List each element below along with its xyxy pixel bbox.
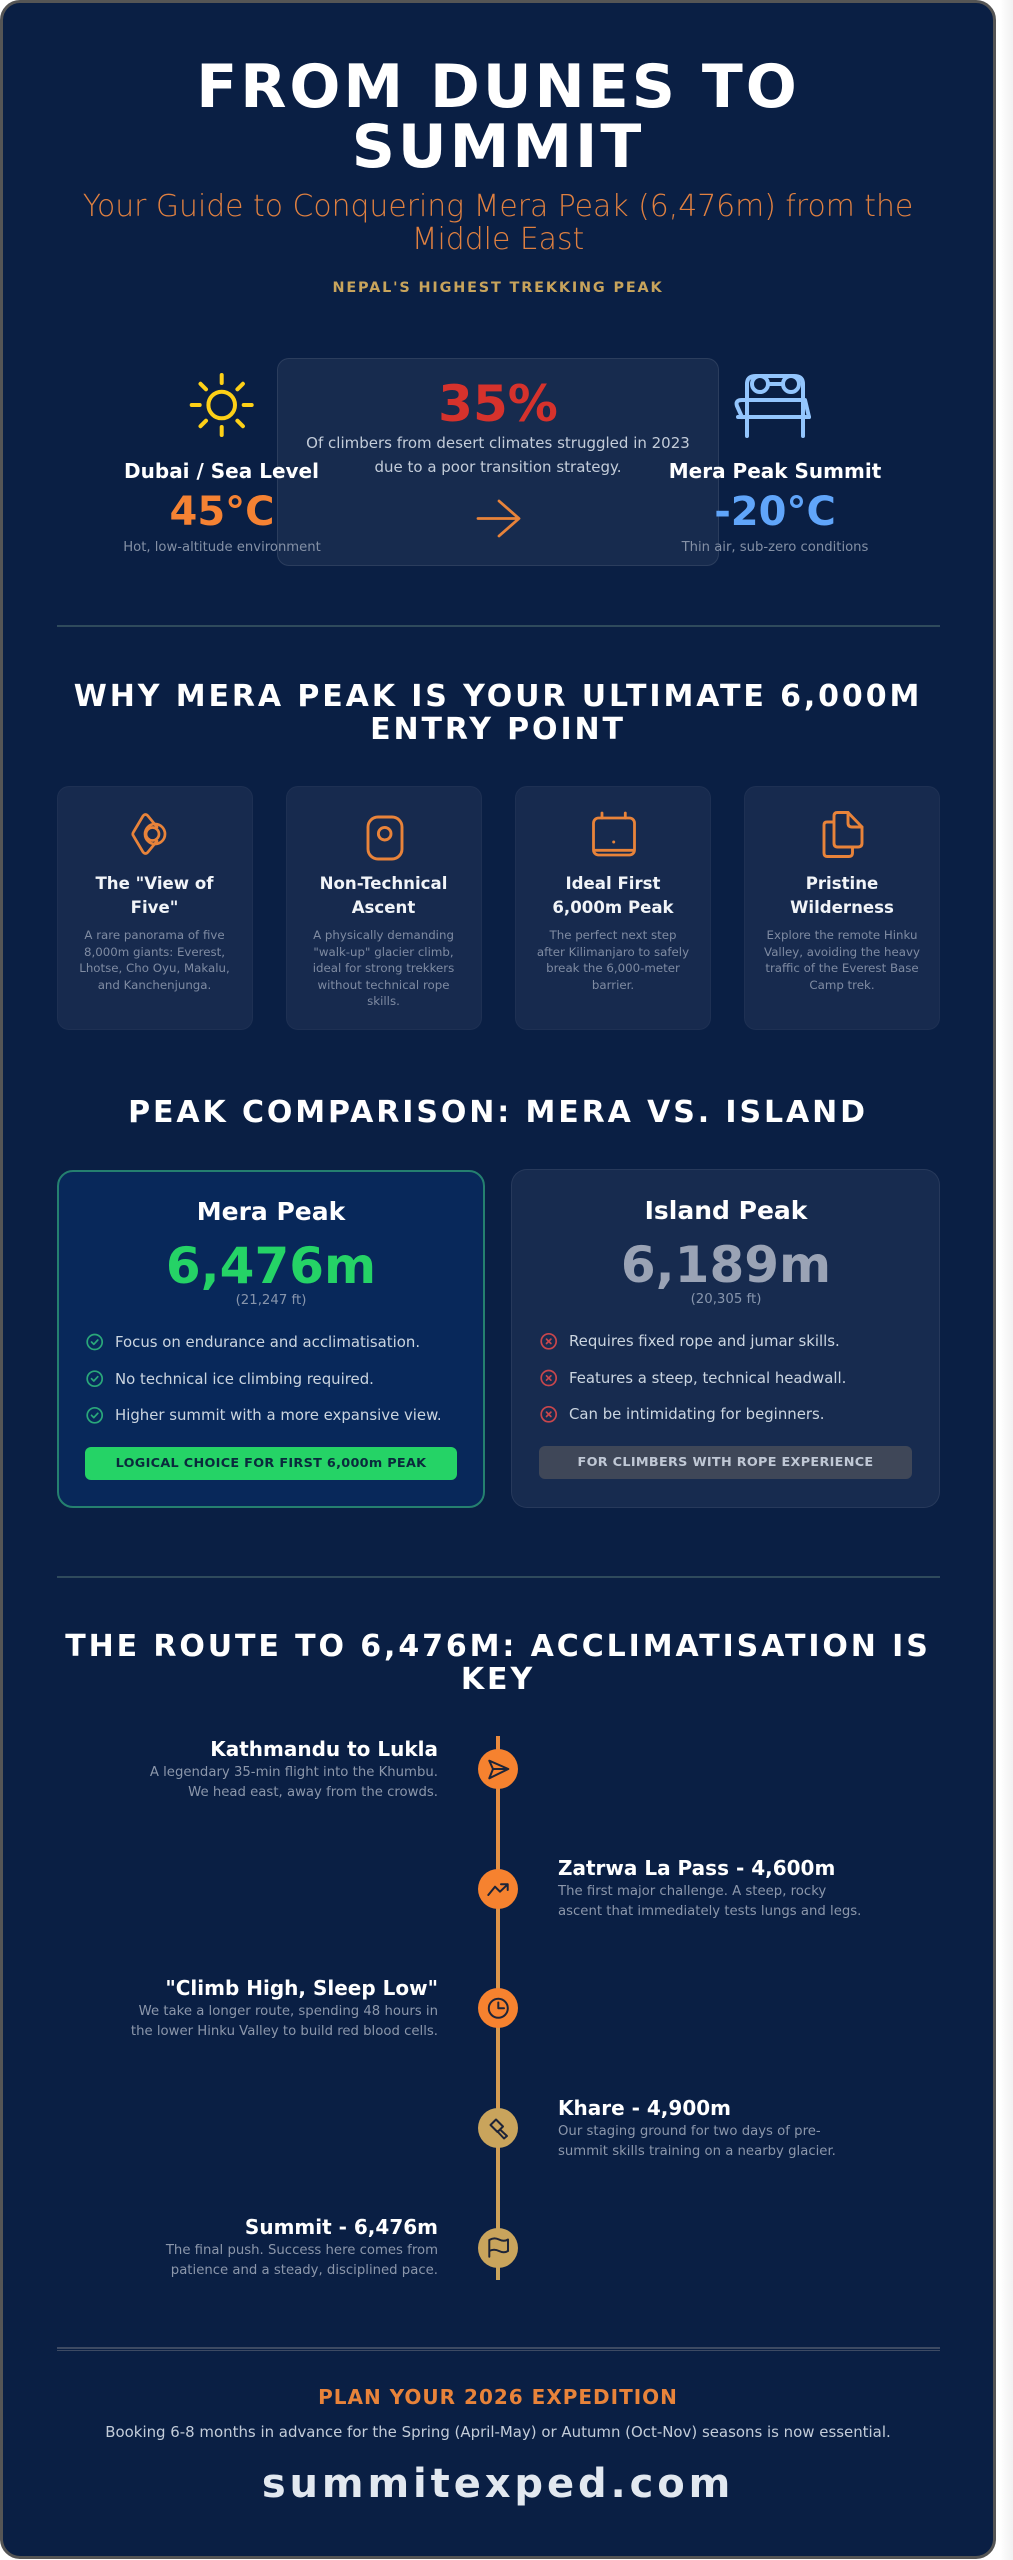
card title: Pristine (806, 874, 878, 893)
item text: patience and a steady, disciplined pace. (171, 2263, 438, 2278)
panel: 35% statistic (277, 358, 719, 566)
card text: barrier. (592, 978, 634, 992)
card title: Ascent (352, 898, 415, 916)
timeline item 3 (131, 1976, 438, 2039)
card text: 8,000m giants: Everest, (84, 944, 225, 958)
card text (79, 928, 230, 992)
list item: Requires fixed rope and jumar skills. (569, 1332, 840, 1350)
card text: A physically demanding (313, 928, 454, 942)
Island verdict badge: FOR CLIMBERS WITH ROPE EXPERIENCE (578, 1455, 873, 1470)
summit label: Mera Peak Summit (669, 459, 881, 483)
statistic description: due to a poor transition strategy. (374, 458, 622, 476)
panel: Island Peak (511, 1169, 940, 1508)
summit temperature: -20°C (714, 489, 836, 535)
card text (313, 928, 454, 1008)
card title: Five" (131, 898, 178, 916)
subtitle: Your Guide to Conquering Mera Peak (6,476m) from the (83, 189, 913, 224)
title: FROM DUNES TO (196, 52, 800, 122)
card text: break the 6,000-meter (546, 961, 680, 975)
statistic number: 35% (438, 375, 558, 433)
Mera verdict badge: LOGICAL CHOICE FOR FIRST 6,000m PEAK (116, 1456, 426, 1471)
item text: We take a longer route, spending 48 hours in (139, 2004, 438, 2019)
item text (558, 2124, 836, 2159)
item text: summit skills training on a nearby glacier. (558, 2144, 836, 2159)
item text: We head east, away from the crowds. (188, 1785, 438, 1800)
item title: Summit - 6,476m (245, 2215, 438, 2239)
list item: Features a steep, technical headwall. (569, 1369, 846, 1387)
footer text: Booking 6-8 months in advance for the Spring (April-May) or Autumn (Oct-Nov) seasons is now essential. (105, 2423, 891, 2441)
card title: Wilderness (790, 898, 894, 916)
panel: Pristine Wilderness (744, 786, 940, 1030)
card text: Explore the remote Hinku (767, 928, 917, 942)
item text: The first major challenge. A steep, rocky (558, 1884, 826, 1899)
Mera height: 6,476m (166, 1237, 376, 1295)
subtitle (83, 189, 913, 257)
panel: Mera Peak (56, 1170, 485, 1508)
card text: Valley, avoiding the heavy (764, 944, 920, 958)
item text: The final push. Success here comes from (166, 2243, 438, 2258)
Mera height in feet: (21,247 ft) (236, 1293, 306, 1308)
item text: Our staging ground for two days of pre- (558, 2124, 821, 2139)
item text: the lower Hinku Valley to build red blood cells. (131, 2024, 438, 2039)
statistic description (306, 434, 690, 476)
title (196, 52, 800, 182)
card title (320, 874, 447, 916)
card text: "walk-up" glacier climb, (313, 944, 454, 958)
card title (552, 874, 674, 916)
panel: Non-Technical Ascent (286, 786, 482, 1030)
card title (95, 874, 214, 916)
summit note: Thin air, sub-zero conditions (682, 540, 868, 555)
timeline item 2 (558, 1856, 861, 1919)
Island height in feet: (20,305 ft) (691, 1292, 761, 1307)
item title: Khare - 4,900m (558, 2096, 731, 2120)
card title: Ideal First (566, 874, 660, 893)
card text (764, 928, 920, 992)
card text: skills. (367, 994, 400, 1008)
heading: the route: KEY (461, 1662, 535, 1697)
item text (558, 1884, 861, 1919)
panel: View of Five (56, 786, 252, 1030)
list item: No technical ice climbing required. (115, 1370, 374, 1388)
item text (150, 1765, 438, 1800)
item title: Kathmandu to Lukla (210, 1737, 438, 1761)
list item: Higher summit with a more expansive view. (115, 1406, 442, 1424)
item title: "Climb High, Sleep Low" (165, 1976, 438, 2000)
heading: why Mera Peak (74, 679, 922, 747)
item text (131, 2004, 438, 2039)
card text: traffic of the Everest Base (765, 961, 919, 975)
Mera name: Mera Peak (197, 1196, 345, 1226)
card text: after Kilimanjaro to safely (537, 944, 689, 958)
Island name: Island Peak (645, 1196, 807, 1224)
card text: without technical rope (318, 978, 450, 992)
Mera verdict badge (85, 1447, 457, 1480)
item title: Zatrwa La Pass - 4,600m (558, 1856, 835, 1880)
list item: Focus on endurance and acclimatisation. (115, 1333, 420, 1351)
card text: A rare panorama of five (84, 928, 225, 942)
panel: Ideal First Peak (515, 786, 711, 1030)
kicker: NEPAL'S HIGHEST TREKKING PEAK (332, 280, 664, 296)
item text: A legendary 35-min flight into the Khumbu. (150, 1765, 438, 1780)
timeline item 1 (150, 1737, 438, 1800)
title: SUMMIT (352, 112, 644, 182)
card text (537, 928, 689, 992)
list item: Can be intimidating for beginners. (569, 1405, 824, 1423)
heading: the route: THE ROUTE TO 6,476M: ACCLIMATISATION IS (65, 1629, 931, 1664)
Island list (540, 1332, 846, 1423)
timeline item 4 (558, 2096, 836, 2159)
subtitle: Middle East (412, 222, 584, 257)
card text: and Kanchenjunga. (98, 978, 211, 992)
heading: why Mera Peak: ENTRY POINT (370, 712, 626, 747)
origin temperature: 45°C (169, 489, 275, 535)
card title (790, 874, 894, 916)
card text: Camp trek. (809, 978, 875, 992)
item text (166, 2243, 438, 2278)
card title: The "View of (95, 874, 214, 893)
heading: the route (65, 1629, 931, 1697)
footer heading: PLAN YOUR 2026 EXPEDITION (318, 2385, 678, 2409)
Mera list (86, 1333, 442, 1424)
card title: Non-Technical (320, 874, 447, 893)
card text: Lhotse, Cho Oyu, Makalu, (79, 961, 230, 975)
origin label: Dubai / Sea Level (124, 459, 319, 483)
item text: ascent that immediately tests lungs and legs. (558, 1904, 861, 1919)
Island verdict badge (539, 1446, 912, 1479)
heading: why Mera Peak: WHY MERA PEAK IS YOUR ULTIMATE 6,000M (74, 679, 922, 714)
timeline item 5 (166, 2215, 438, 2278)
Island height: 6,189m (621, 1236, 831, 1294)
origin note: Hot, low-altitude environment (123, 540, 321, 555)
footer website: summitexped.com (262, 2461, 734, 2507)
statistic description: Of climbers from desert climates struggled in 2023 (306, 434, 690, 452)
heading: peak comparison: PEAK COMPARISON: MERA VS. ISLAND (128, 1095, 868, 1130)
card title: 6,000m Peak (552, 898, 674, 916)
card text: The perfect next step (550, 928, 676, 942)
card text: ideal for strong trekkers (313, 961, 454, 975)
